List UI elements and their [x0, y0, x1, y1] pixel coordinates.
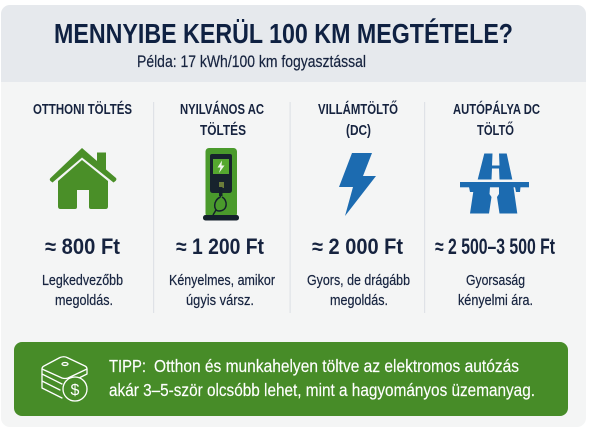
heading: autópálya DC töltő: AUTÓPÁLYA DC	[453, 100, 540, 118]
icon: house	[50, 148, 116, 209]
panel: autópálya DC töltő	[435, 100, 555, 309]
heading: nyilvános AC töltés: NYILVÁNOS AC	[180, 101, 264, 118]
description: gyors, de drágább megoldás	[307, 273, 410, 309]
panel: villámtöltő DC	[307, 100, 410, 309]
description: kényelmes, amikor úgyis vársz: Kényelmes, amikor	[169, 273, 275, 289]
tip text	[109, 356, 535, 400]
description: gyorsaság kényelmi ára: Gyorsaság	[466, 273, 525, 289]
description: gyors, de drágább megoldás: Gyors, de drágább	[307, 273, 410, 289]
description: legkedvezőbb megoldás: megoldás.	[55, 293, 113, 309]
description: legkedvezőbb megoldás	[42, 273, 123, 309]
icon: charging station	[203, 148, 239, 220]
description: kényelmes, amikor úgyis vársz	[169, 273, 275, 309]
icon: lightning bolt	[339, 153, 376, 216]
icon: motorway	[460, 154, 529, 214]
heading: autópálya DC töltő: TÖLTŐ	[477, 121, 514, 139]
price: 1 200 Ft: ≈ 1 200 Ft	[176, 234, 265, 259]
description: gyorsaság kényelmi ára: kényelmi ára.	[458, 293, 533, 309]
heading: nyilvános AC töltés	[180, 101, 264, 139]
panel: otthoni töltés	[33, 101, 132, 309]
price: 2 000 Ft: ≈ 2 000 Ft	[312, 234, 404, 259]
tip text: akár 3–5-ször olcsóbb lehet, mint a hagyományos üzemanyag.	[109, 380, 535, 400]
icon: money stack with coin: $	[71, 382, 80, 399]
description: legkedvezőbb megoldás: Legkedvezőbb	[42, 273, 123, 289]
tip text: TIPP:	[109, 356, 146, 376]
heading: villámtöltő DC: (DC)	[346, 123, 371, 139]
heading: villámtöltő DC	[318, 100, 398, 139]
price: 800 Ft: ≈ 800 Ft	[45, 234, 121, 259]
icon: money stack with coin	[42, 357, 87, 401]
tip text: Otthon és munkahelyen töltve az elektromos autózás	[154, 356, 519, 376]
subtitle: Példa: 17 kWh/100 km fogyasztással	[137, 53, 366, 71]
description: kényelmes, amikor úgyis vársz: úgyis vársz.	[186, 293, 254, 309]
heading: autópálya DC töltő	[453, 100, 540, 139]
callout: tip	[14, 342, 568, 416]
heading: villámtöltő DC: VILLÁMTÖLTŐ	[318, 100, 398, 118]
heading: otthoni töltés: OTTHONI TÖLTÉS	[33, 101, 132, 118]
description: gyorsaság kényelmi ára	[458, 273, 533, 309]
heading: nyilvános AC töltés: TÖLTÉS	[200, 122, 246, 139]
description: gyors, de drágább megoldás: megoldás.	[330, 293, 388, 309]
panel: nyilvános AC töltés	[169, 101, 275, 309]
